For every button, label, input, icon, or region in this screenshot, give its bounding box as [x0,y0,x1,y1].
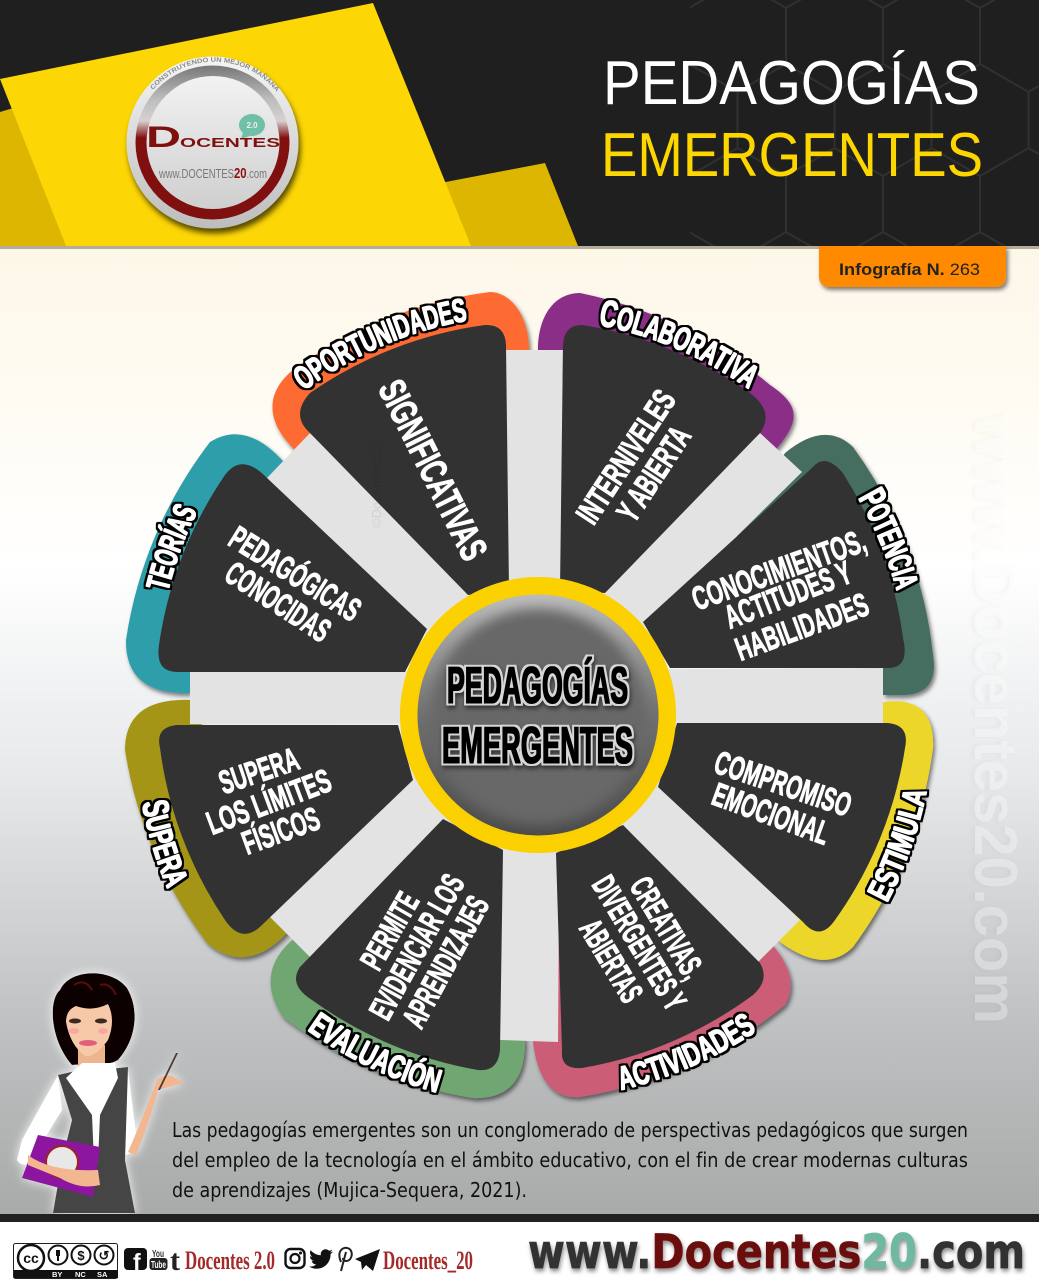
wheel diagram [110,292,939,1104]
wedge text: compromiso emocional: EMOCIONAL [708,775,835,852]
header band [0,0,1039,249]
icon: youtube [150,1249,168,1271]
hub title: PEDAGOGÍAS [447,657,628,715]
wedge text: supera: FÍSICOS [237,799,325,862]
teacher character [17,973,184,1213]
wedge text: conocimientos: HABILIDADES [730,585,873,668]
wedge: compromiso emocional [658,723,906,932]
wedge text: significativas: SIGNIFICATIVAS [369,373,495,567]
icon: creative commons license: BY [52,1270,62,1279]
badge: infografía number: Infografía N. 263 [839,260,980,279]
wedge text: creativas: CREATIVAS, [623,870,712,985]
website url: www.Docentes20.com [528,1225,1025,1280]
icon: youtube: Tube [151,1260,166,1271]
band label: colaborativa: COLABORATIVA [598,298,760,392]
title: PEDAGOGÍAS [603,49,980,118]
icon: creative commons license [14,1244,118,1279]
faint copyright watermark: ©Docentes2.0 [369,445,384,528]
wedge: creativas, divergentes y abiertas [556,825,764,1068]
wedge text: interniveles y abierta: Y ABIERTA [609,419,698,528]
handle: Docentes_20: Docentes_20 [383,1246,473,1275]
wedge text: permite: EVIDENCIAR LOS [362,868,472,1026]
wedge text: permite: APRENDIZAJES [395,890,496,1034]
band: oportunidades [272,292,529,600]
wedge: interniveles y abierta [560,325,766,593]
icon: tumblr: t [170,1244,180,1277]
icon: twitter [309,1249,333,1269]
band label: evaluación: EVALUACIÓN [306,1010,445,1095]
title [601,49,983,190]
wedge text: creativas [572,869,712,1017]
logo: Docentes 2.0 badge: CONSTRUYENDO UN MEJOR MAÑANA [150,57,279,92]
wedge: pedagógicas conocidas [158,464,427,672]
wedge text: pedagógicas conocidas: PEDAGÓGICAS [223,519,368,628]
wedge: supera los límites físicos [159,725,413,934]
band label: oportunidades: OPORTUNIDADES [292,296,468,390]
icon: facebook: f [133,1249,141,1275]
band: colaborativa [538,293,794,600]
wedge text: conocimientos [687,522,873,668]
logo: Docentes 2.0 badge: OCENTES [180,135,281,150]
icon: creative commons license: ↺ [99,1248,110,1263]
wedge: conocimientos, actitudes y habilidades [643,461,905,668]
wedge text: conocimientos: ACTITUDES Y [719,553,857,636]
title: EMERGENTES [601,121,983,190]
description paragraph [172,1118,968,1202]
band label: actividades: ACTIVIDADES [618,1012,757,1092]
wedge text: creativas: DIVERGENTES Y [585,869,694,1017]
description paragraph: de aprendizajes (Mujica-Sequera, 2021). [172,1178,527,1202]
band label: teorías: TEORÍAS [144,502,198,590]
hub title: EMERGENTES [442,717,633,775]
band label: potencia: POTENCIA [856,484,920,593]
band label: supera: SUPERA [140,798,189,891]
footer [0,1214,1039,1286]
wedge text: pedagógicas conocidas: CONOCIDAS [219,554,338,649]
logo: Docentes 2.0 badge: D [146,121,181,154]
icon: creative commons license: SA [97,1270,108,1279]
wedge text: permite: PERMITE [353,886,426,976]
icon: creative commons license: cc [23,1250,39,1266]
wedge text: interniveles y abierta: INTERNIVELES [568,383,683,530]
wedge text: supera: LOS LÍMITES [201,761,336,842]
logo: Docentes 2.0 badge: 2.0 [246,121,258,130]
icon: creative commons license: NC [75,1270,86,1279]
icon: creative commons license: $ [77,1248,85,1263]
band: evaluación [271,850,525,1098]
spokes [190,350,883,1042]
hub title [442,657,633,775]
band: potencia [700,435,934,695]
band: teorías [126,434,400,693]
wedge text: permite [353,868,496,1034]
vertical watermark: www.Docentes20.com [962,413,1029,1024]
band: supera [125,700,400,957]
wedge text: compromiso emocional [708,743,856,852]
icon: instagram [286,1249,304,1268]
wedge text: supera: SUPERA [214,740,304,801]
wedge text: pedagógicas conocidas [219,519,368,649]
central hub [400,577,676,853]
band: actividades [533,880,791,1097]
wedge: significativas [300,325,509,595]
band label: estimula: ESTIMULA [864,789,930,904]
wedge: permite evidenciar los aprendizajes [296,819,503,1070]
logo: Docentes 2.0 badge: www.DOCENTES20.com [158,165,267,182]
wedge text: supera [201,740,336,862]
badge: infografía number [819,246,1006,287]
wedge text: creativas: ABIERTAS [572,913,650,1009]
icon: telegram [355,1249,380,1271]
icon: pinterest [339,1248,352,1271]
handle: Docentes 2.0: Docentes 2.0 [185,1246,275,1275]
page background [0,249,1039,1214]
wedge text: conocimientos: CONOCIMIENTOS, [687,522,871,617]
logo: Docentes 2.0 badge [124,56,305,238]
wedge text: compromiso emocional: COMPROMISO [710,743,856,824]
wedge text: interniveles y abierta [568,383,698,530]
icon: facebook [124,1248,147,1275]
icon: youtube: You [152,1249,164,1260]
band: estimula [700,701,933,960]
